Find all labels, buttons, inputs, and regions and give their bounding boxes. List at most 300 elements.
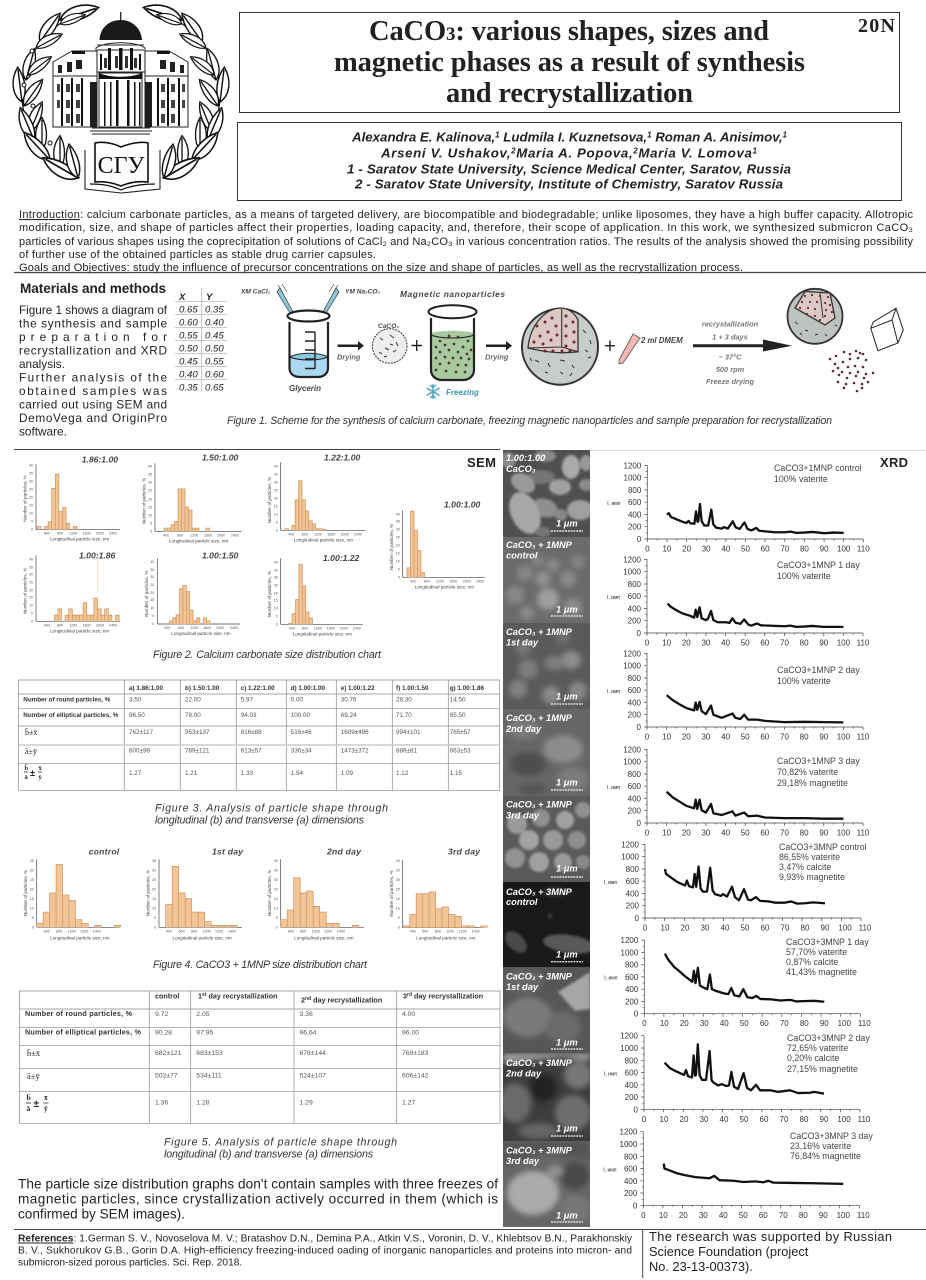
histogram 1.00:1.00: 30 [396, 527, 400, 531]
XRD chart 3MNP 1 day: 1000 [621, 948, 639, 957]
table: particle shape by ratio: 0.00 [291, 696, 303, 704]
histogram 1.00:1.50: 2000 [216, 626, 224, 630]
histogram 2nd day: Number of particles, % [267, 870, 272, 916]
authors box: Maria A. Popova, [516, 146, 633, 160]
table: particle shape by ratio: 1.21 [185, 770, 198, 777]
table: particle shape by recrystallization day: b̄±x̄ [27, 1048, 41, 1058]
ratio labels for histograms [79, 452, 481, 563]
materials and methods heading: Materials and methods [20, 281, 166, 296]
XRD chart 1MNP control: 200 [628, 523, 642, 532]
XRD chart 1MNP 1 day: 40 [721, 638, 731, 648]
table: particle shape by ratio: 96.50 [129, 712, 145, 719]
XRD chart 1MNP 2 day: 80 [800, 732, 809, 742]
materials and methods text: preparation for [19, 330, 167, 344]
histogram 3rd day: 800 [435, 930, 441, 934]
histogram 1.00:1.50: 0 [152, 622, 154, 626]
table: particle shape by ratio: 85.50 [450, 712, 466, 719]
histogram 1.86:1.00: Number of particles, % [22, 475, 28, 522]
table: particle shape by recrystallization day: Number of elliptical particles, % [25, 1028, 142, 1036]
XRD chart 3MNP 1 day: 30 [700, 1019, 709, 1028]
histogram 1.00:1.50: 25 [150, 583, 154, 587]
histogram 1.00:1.50: 20 [150, 591, 154, 595]
XRD chart 1MNP 1 day: 0 [645, 638, 650, 648]
table: particle shape by recrystallization day: day recrystallization [206, 992, 278, 1000]
XRD chart 3MNP 2 day: I, имп [604, 1071, 617, 1077]
table: particle shape by ratio: 14.50 [450, 696, 466, 704]
histogram 1st day: Longitudinal particle size, nm [172, 935, 232, 940]
XRD chart 1MNP 1 day: 600 [628, 592, 642, 601]
histogram 3rd day: 0 [398, 926, 400, 930]
closing note: confirmed by SEM images). [18, 1206, 185, 1222]
XRD chart 1MNP control: 100% vaterite [774, 474, 828, 484]
XRD chart 3MNP control: 86,55% vaterite [779, 852, 840, 862]
XRD chart 1MNP control: 30 [702, 544, 711, 554]
figure 1 caption: Figure 1. Scheme for the synthesis of calcium carbonate, freezing magnetic nanoparticles and sample preparation for recrystallization [227, 415, 832, 427]
XRD chart 1MNP 1 day: 20 [682, 638, 691, 648]
XRD chart 3MNP control [604, 840, 872, 932]
materials and methods text: Further analysis of the [19, 370, 167, 384]
XRD chart 1MNP 2 day: 90 [819, 732, 829, 742]
table: particle shape by recrystallization day [20, 991, 500, 1123]
histogram 1.86:1.00: 30 [29, 480, 33, 484]
arrow: drying: Drying [485, 352, 509, 362]
histogram 1.00:1.00: 25 [396, 535, 400, 539]
histogram 1.50:1.00: Longitudinal particle size, nm [169, 538, 228, 543]
arrow: drying: Drying [337, 352, 361, 362]
histogram 1.00:1.50: 40 [150, 560, 154, 564]
right laurel branch [142, 0, 231, 185]
XRD chart 1MNP 1 day: 800 [628, 580, 642, 589]
XRD chart 1MNP 1 day: 110 [857, 638, 870, 648]
XRD chart 1MNP 3 day: 800 [628, 770, 642, 779]
XRD chart 3MNP control: 70 [781, 924, 790, 932]
SEM image labels: 1 μm [556, 692, 578, 702]
XRD chart 1MNP 1 day: 60 [760, 638, 770, 648]
histogram 1.50:1.00: 35 [148, 472, 152, 476]
XRD chart 3MNP 3 day: I, имп [603, 1167, 617, 1173]
table: particle shape by ratio: 3.50 [129, 696, 142, 704]
table: particle shape by ratio [18, 680, 500, 790]
SEM image labels: 1 μm [556, 1124, 578, 1134]
XRD chart 3MNP 1 day: I, имп [604, 976, 618, 982]
XRD chart 3MNP 2 day: 0 [634, 1105, 639, 1114]
XRD chart 1MNP 1 day: 80 [800, 638, 809, 648]
table: particle shape by recrystallization day: 2 [301, 996, 305, 1004]
authors box: 1 - Saratov State University, Science Medical Center, Saratov, Russia [347, 162, 791, 176]
table: particle shape by ratio: 69.24 [341, 712, 357, 719]
SEM image labels: CaCO₃ + 1MNP [506, 540, 573, 550]
SEM image 3MNP control [501, 882, 596, 967]
histogram 1.22:1.00: 400 [288, 532, 294, 536]
histogram 1.00:1.00: Number of particles, % [389, 524, 394, 570]
histogram 1.00:1.00: 35 [396, 519, 400, 523]
synthesis scheme [240, 284, 903, 399]
XRD chart 3MNP 3 day: 90 [819, 1211, 828, 1220]
table: particle shape by recrystallization day: 524±107 [300, 1072, 326, 1080]
histogram 1.22:1.00: 2400 [354, 532, 362, 536]
XRD chart 1MNP control [607, 461, 870, 554]
XRD chart 3MNP control: 0 [635, 914, 640, 923]
XRD chart 1MNP 3 day: 80 [800, 828, 809, 838]
beaker with glycerin [288, 310, 330, 393]
XRD chart 1MNP 1 day: 90 [819, 638, 829, 648]
histogram 1.22:1.00: 40 [274, 464, 278, 468]
XRD chart 1MNP 2 day: 1200 [623, 649, 642, 658]
histogram 1.86:1.00: Longitudinal particle size, nm [50, 537, 109, 542]
calcium carbonate particle [372, 323, 407, 363]
figure 3 caption: Figure 3. Analysis of particle shape through [155, 802, 388, 814]
histogram 2nd day: 5 [276, 916, 278, 920]
authors box: 2 [510, 146, 516, 156]
table: particle shape by ratio: 5.97 [241, 696, 253, 704]
XRD chart 3MNP 1 day: 0,87% calcite [786, 957, 838, 967]
histogram control: 1400 [93, 929, 101, 933]
big arrow: recrystallization conditions [693, 320, 792, 386]
SEM image labels: CaCO₃ + 3MNP [506, 1058, 573, 1068]
X Y ratio table: 0.50 [179, 344, 198, 354]
histogram 1.00:1.22: 2000 [340, 626, 348, 630]
XRD chart 1MNP control: 600 [628, 498, 642, 507]
histogram 1.86:1.00: 20 [29, 496, 33, 500]
histogram 1.00:1.00: 5 [398, 567, 400, 571]
XRD chart 1MNP control: 10 [662, 544, 672, 554]
table: particle shape by ratio: 953±137 [185, 729, 210, 736]
SEM image labels: 1 μm [556, 1038, 578, 1048]
X Y ratio table: 0.65 [205, 382, 224, 394]
histogram 1.86:1.00: 400 [44, 532, 50, 536]
XRD chart 1MNP 2 day: 20 [682, 732, 691, 742]
table: particle shape by ratio: 816±88 [241, 729, 262, 736]
table: particle shape by recrystallization day: Number of round particles, % [25, 1009, 133, 1018]
histogram 1.50:1.00: 0 [150, 529, 152, 533]
histogram 1.00:1.86: 30 [29, 572, 33, 576]
XRD chart 1MNP 1 day: 50 [741, 638, 750, 648]
snowflake: freezing [426, 384, 479, 399]
histogram 2nd day: 1400 [337, 929, 345, 933]
XRD chart 1MNP 2 day: 0 [637, 723, 642, 732]
histogram 1.22:1.00: 15 [274, 504, 278, 508]
histogram 1.00:1.00: 40 [396, 512, 400, 516]
histogram 3rd day: 1400 [472, 930, 480, 934]
X Y ratio table: 0.45 [179, 356, 198, 368]
histogram 2nd day: 35 [274, 859, 278, 863]
big arrow: recrystallization conditions: recrystallization [702, 320, 759, 328]
table: particle shape by recrystallization day: 2.05 [196, 1011, 210, 1018]
SEM scale bars [551, 531, 583, 1222]
building [53, 12, 188, 134]
histogram 1.00:1.86: 10 [29, 603, 33, 607]
histogram 1.22:1.00: 1600 [327, 532, 335, 536]
XRD chart 3MNP 1 day: 10 [660, 1019, 669, 1028]
table: particle shape by ratio: ā±ȳ [25, 747, 37, 756]
histogram 1st day: 1400 [228, 929, 236, 933]
XRD chart 3MNP 3 day: 800 [624, 1152, 638, 1161]
references: References: 1.German S. V., Novoselova M. V.; Bratashov D.N., Demina P.A., Atkin V.S., Voronin, D. V., Khlebtsov B.N., Parakhonskiy [18, 1234, 633, 1244]
histogram 1.00:1.86: 20 [29, 588, 33, 592]
closing note: magnetic particles, since crystallization actively occurred in them (which is [18, 1192, 498, 1206]
XRD chart 3MNP 3 day: 76,84% magnetite [790, 1151, 861, 1161]
histogram control: 1200 [80, 929, 88, 933]
table: particle shape by recrystallization day: 534±111 [196, 1072, 222, 1080]
XRD chart 3MNP 3 day [603, 1128, 873, 1220]
XRD chart 1MNP 3 day: 10 [662, 828, 672, 838]
XRD chart 1MNP 2 day: 1000 [623, 662, 642, 671]
XRD chart 3MNP 1 day: 800 [625, 961, 639, 970]
table: particle shape by recrystallization day: 769±183 [402, 1050, 429, 1057]
table: particle shape by recrystallization day: 96.64 [300, 1030, 317, 1036]
XRD chart 1MNP 3 day: 110 [857, 828, 870, 838]
XRD chart 1MNP 1 day: 200 [628, 617, 642, 626]
beaker with glycerin: Glycerin [289, 384, 321, 393]
histogram control: Longitudinal particle size, nm [50, 935, 110, 940]
table: particle shape by recrystallization day: 683±153 [196, 1050, 223, 1057]
table: particle shape by ratio: 613±57 [241, 748, 262, 754]
histogram 1.00:1.50: 15 [150, 598, 154, 602]
XRD chart 1MNP control: 400 [628, 510, 642, 520]
XRD chart 1MNP control: 20 [682, 544, 692, 554]
histogram control: 10 [30, 906, 34, 910]
arrow: drying [485, 341, 512, 362]
materials and methods text: recrystallization and XRD [19, 344, 167, 358]
X Y ratio table: Y [206, 292, 214, 303]
authors box: Ludmila I. Kuznetsova, [500, 130, 647, 144]
histogram 1.86:1.00: 2400 [109, 532, 117, 536]
histogram 1.00:1.86: 15 [29, 595, 33, 599]
XRD chart 3MNP 3 day: 0 [633, 1201, 638, 1210]
XRD chart 3MNP control: 600 [626, 877, 640, 886]
histogram control: 600 [44, 929, 50, 933]
histogram control: 15 [30, 897, 34, 901]
table: particle shape by recrystallization day: 9.72 [155, 1011, 168, 1018]
histogram 1.00:1.00: 400 [410, 579, 416, 583]
histogram 1.22:1.00: 20 [274, 496, 278, 500]
authors box: 2 - Saratov State University, Institute of Chemistry, Saratov Russia [354, 176, 783, 192]
table: particle shape by ratio: 71.70 [396, 712, 412, 719]
XRD chart 1MNP control: 110 [857, 544, 870, 554]
table: particle shape by ratio: 600±98 [129, 748, 150, 754]
histogram 1.00:1.00 [389, 510, 485, 589]
histogram control: 5 [32, 916, 34, 920]
histogram 3rd day: Number of particles, % [389, 870, 394, 917]
table: particle shape by ratio: 1473±372 [341, 748, 369, 754]
X Y ratio table: 0.55 [179, 330, 198, 342]
table: particle shape by ratio: 663±53 [450, 748, 471, 754]
references: submicron-sized porous particles. Sci. Rep. 2018. [18, 1258, 242, 1268]
histogram 1.50:1.00 [142, 463, 242, 543]
XRD chart 1MNP 2 day: I, имп [607, 689, 620, 695]
XRD chart 3MNP 2 day: 10 [660, 1115, 669, 1124]
table: particle shape by ratio: 1.54 [291, 770, 303, 777]
histogram 1.22:1.00: 25 [274, 488, 278, 492]
XRD chart 3MNP 2 day: 27,15% magnetite [787, 1064, 858, 1074]
XRD chart 3MNP control: 30 [701, 924, 710, 932]
day labels for histograms: 3rd day [448, 846, 481, 856]
references: B. V., Sukhorukov G.B., Gorin D.A. High-efficiency freezing-induced oading of inorganic nanoparticles and proteins into micron- and [18, 1246, 632, 1256]
histogram 3rd day: 30 [396, 869, 400, 873]
pipettes: YM Na₂CO₃ [345, 288, 381, 296]
histogram 3rd day: 35 [396, 859, 400, 863]
histogram 1.00:1.86 [22, 555, 120, 633]
histogram 1.50:1.00: 400 [163, 533, 169, 537]
XRD chart 1MNP 1 day: 70 [780, 638, 789, 648]
XRD chart 3MNP 1 day: 60 [760, 1019, 769, 1028]
XRD chart 3MNP 1 day: 41,43% magnetite [786, 967, 857, 977]
SEM image labels: CaCO₃ + 3MNP [506, 972, 573, 982]
XRD chart 1MNP 3 day: 70,82% vaterite [777, 767, 838, 777]
XRD chart 3MNP control: 1000 [621, 853, 640, 862]
SEM image labels: 2nd day [505, 1068, 542, 1078]
day labels for histograms: 1st day [212, 846, 244, 856]
XRD chart 3MNP 2 day: 800 [625, 1056, 639, 1065]
XRD chart 3MNP 2 day: 1200 [620, 1032, 639, 1041]
funding note [649, 1229, 892, 1274]
table: particle shape by recrystallization day: ā±ȳ [27, 1071, 40, 1081]
histogram 1.00:1.50: 2400 [230, 626, 238, 630]
histogram 1.86:1.00: 2000 [96, 532, 104, 536]
XRD chart 1MNP 3 day: 20 [682, 828, 691, 838]
XRD chart 1MNP control: 100 [837, 544, 851, 554]
table: particle shape by recrystallization day: 90.28 [155, 1030, 172, 1036]
histogram 1st day: 10 [152, 906, 156, 910]
XRD chart 3MNP 3 day: 100 [837, 1211, 851, 1220]
XRD chart 3MNP 3 day: 80 [799, 1211, 808, 1220]
XRD chart 1MNP 3 day: 1000 [623, 758, 642, 767]
histogram 2nd day: 1000 [312, 929, 320, 933]
table: particle shape by ratio: c) 1.22:1.00 [241, 685, 275, 692]
X Y ratio table: 0.60 [205, 370, 224, 380]
histogram 1st day: 1000 [203, 929, 211, 933]
table: particle shape by ratio: Number of round particles, % [23, 696, 111, 704]
XRD chart 1MNP control: 800 [628, 486, 642, 495]
figure 5 caption: longitudinal (b) and transverse (a) dimensions [164, 1148, 374, 1160]
funding note: The research was supported by Russian [649, 1229, 892, 1244]
histogram 2nd day: 15 [274, 897, 278, 901]
table: particle shape by ratio: ā [24, 774, 28, 781]
XRD chart 3MNP 2 day: 20 [680, 1115, 689, 1124]
histogram 1.00:1.86: 1600 [83, 623, 91, 627]
table: particle shape by ratio: 100.00 [291, 712, 310, 719]
histogram 1.00:1.22: 5 [276, 614, 278, 618]
XRD chart 1MNP 1 day [607, 555, 870, 648]
XRD chart 3MNP control: 20 [681, 924, 690, 932]
table: particle shape by recrystallization day: 678±144 [300, 1050, 326, 1057]
open book with letters [85, 142, 160, 193]
SEM image labels: 3rd day [506, 810, 540, 820]
histogram 1.00:1.50: 400 [164, 626, 170, 630]
X Y ratio table: 0.40 [179, 370, 198, 380]
histogram 1.22:1.00: 1200 [314, 532, 322, 536]
histogram 1.50:1.00: 5 [150, 521, 152, 525]
XRD chart 3MNP 1 day: 40 [720, 1019, 729, 1028]
table: particle shape by ratio: b̄ [24, 765, 28, 772]
histogram 2nd day: 1200 [324, 929, 332, 933]
XRD chart 1MNP control: 70 [780, 544, 790, 554]
XRD chart 1MNP 3 day: 1200 [623, 745, 642, 754]
XRD chart 1MNP 3 day: 40 [721, 828, 731, 838]
XRD chart 1MNP 2 day: 800 [628, 674, 642, 683]
histogram 1.50:1.00: 800 [177, 533, 183, 537]
table: particle shape by ratio: x̄ [38, 765, 42, 772]
histogram 1st day: 0 [154, 925, 156, 929]
histogram 1.00:1.00: 1600 [449, 579, 457, 583]
XRD chart 3MNP 3 day: 60 [759, 1211, 768, 1220]
XRD chart 1MNP control: I, имп [607, 501, 621, 507]
XRD chart 3MNP 2 day: 200 [625, 1093, 639, 1102]
ratio labels for histograms: 1.86:1.00 [82, 454, 118, 464]
SEM image 3MNP 3rd day [503, 1141, 591, 1227]
histogram 1.00:1.50: 35 [150, 568, 154, 572]
big arrow: recrystallization conditions: ~ 37°C [719, 352, 742, 362]
table: particle shape by ratio: e) 1.00:1.22 [341, 685, 375, 692]
released nanoparticles [830, 351, 873, 391]
histogram 1.00:1.22: 20 [274, 591, 278, 595]
XRD chart 3MNP 3 day: 40 [719, 1211, 728, 1220]
histogram 3rd day: 15 [396, 897, 400, 901]
XRD chart 3MNP 1 day: 200 [625, 997, 639, 1006]
XRD chart 3MNP control: 50 [741, 924, 750, 932]
table: particle shape by recrystallization day: 96.00 [402, 1030, 419, 1036]
authors box: Roman A. Anisimov, [652, 130, 783, 144]
table: particle shape by ratio: 1.15 [450, 770, 462, 777]
histogram 2nd day: 20 [274, 887, 278, 891]
day labels for histograms: 2nd day [326, 846, 362, 856]
histogram 1.00:1.22: Number of particles, % [267, 571, 272, 617]
histogram 3rd day: 400 [410, 930, 416, 934]
ratio labels for histograms: 1.22:1.00 [324, 452, 361, 462]
XRD chart 3MNP 2 day [604, 1032, 871, 1124]
histogram 1.50:1.00: 15 [148, 505, 152, 509]
table: particle shape by ratio: 886±81 [396, 748, 417, 754]
histogram 1.00:1.86: 5 [31, 611, 33, 615]
histogram control [23, 859, 121, 940]
ratio labels for histograms: 1.00:1.50 [202, 550, 239, 560]
table: particle shape by ratio: g) 1.00:1.86 [450, 685, 484, 692]
XRD chart 3MNP 2 day: 60 [760, 1115, 769, 1124]
SEM image labels: control [506, 550, 538, 560]
table: particle shape by recrystallization day: 3.36 [300, 1011, 313, 1018]
XRD chart 1MNP control: 50 [741, 544, 750, 554]
histogram 1st day: 1200 [215, 929, 223, 933]
histogram 1.00:1.22: 40 [274, 560, 278, 564]
ratio labels for histograms: 1.00:1.86 [79, 550, 116, 560]
calcite cube [871, 308, 903, 351]
histogram 1.50:1.00: 25 [148, 488, 152, 492]
XRD chart 3MNP 1 day: 20 [680, 1019, 689, 1028]
materials and methods text: carried out using SEM and [19, 398, 167, 412]
histogram 1.00:1.50 [144, 558, 240, 636]
XRD chart 1MNP 2 day: 0 [645, 732, 650, 742]
plus sign [412, 340, 422, 351]
XRD chart 3MNP 3 day: 110 [857, 1211, 870, 1220]
XRD chart 1MNP 1 day: 100 [837, 638, 851, 648]
histogram 1st day: 25 [152, 878, 156, 882]
SEM image labels: 1 μm [556, 864, 578, 874]
XRD chart 1MNP 3 day: 400 [628, 794, 642, 804]
XRD chart 3MNP 3 day: 1200 [620, 1128, 638, 1137]
histogram 3rd day: 25 [396, 878, 400, 882]
table: particle shape by recrystallization day: 1 [198, 992, 202, 1000]
SEM image 3MNP 1st day [503, 967, 590, 1053]
XRD chart 1MNP 1 day: 10 [662, 638, 672, 648]
XRD chart 1MNP 2 day: 40 [721, 732, 731, 742]
ratio labels for histograms: 1.00:1.22 [323, 553, 360, 563]
XRD chart 3MNP 3 day: 1000 [620, 1140, 638, 1149]
histogram 1.86:1.00: 1200 [69, 532, 77, 536]
authors box: Arseni V. Ushakov, [381, 146, 511, 160]
histogram 1.00:1.00: 2400 [476, 579, 484, 583]
XRD chart 1MNP 2 day: 200 [628, 711, 642, 720]
histogram 1.86:1.00: 5 [31, 520, 33, 524]
